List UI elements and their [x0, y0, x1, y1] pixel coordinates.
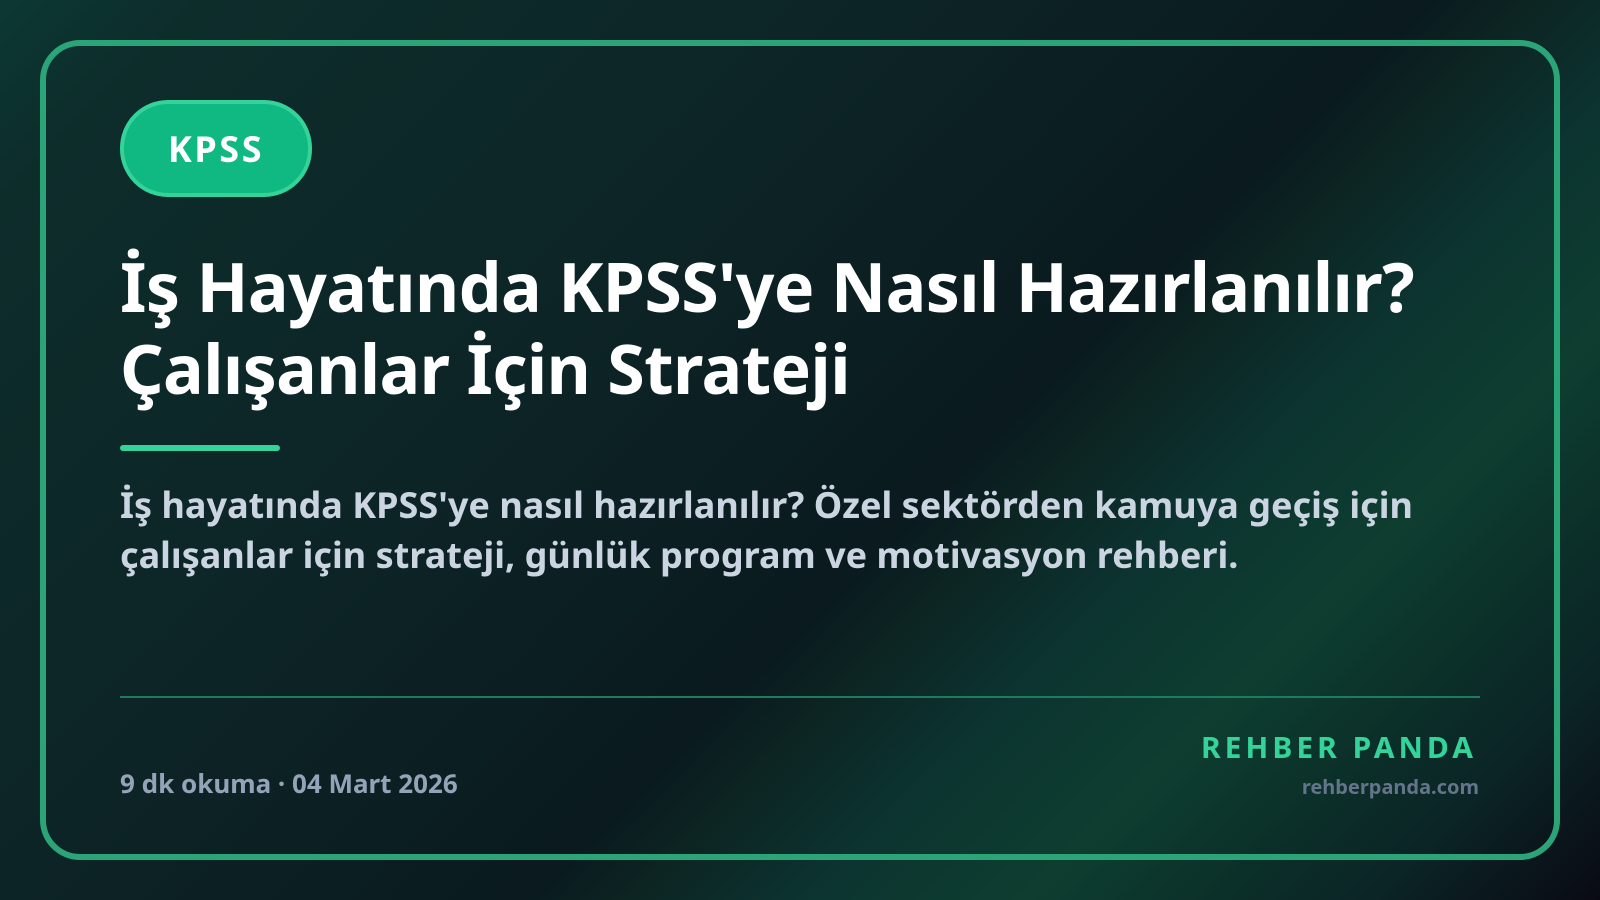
title: İş Hayatında KPSS'ye Nasıl Hazırlanılır? [120, 239, 1414, 332]
description [120, 480, 1413, 579]
badge: KPSS: KPSS [168, 124, 264, 173]
reading time and date: 9 dk okuma · 04 Mart 2026 [120, 765, 458, 801]
badge: KPSS [120, 100, 312, 197]
brand name: REHBER PANDA [1201, 726, 1477, 767]
title: Çalışanlar İçin Strateji [120, 321, 850, 414]
brand url: rehberpanda.com [1302, 773, 1479, 800]
description: İş hayatında KPSS'ye nasıl hazırlanılır? Özel sektörden kamuya geçiş için [120, 480, 1413, 529]
title [120, 239, 1414, 414]
footer divider [120, 696, 1480, 698]
title accent bar [120, 445, 280, 451]
description: çalışanlar için strateji, günlük program ve motivasyon rehberi. [120, 530, 1238, 579]
